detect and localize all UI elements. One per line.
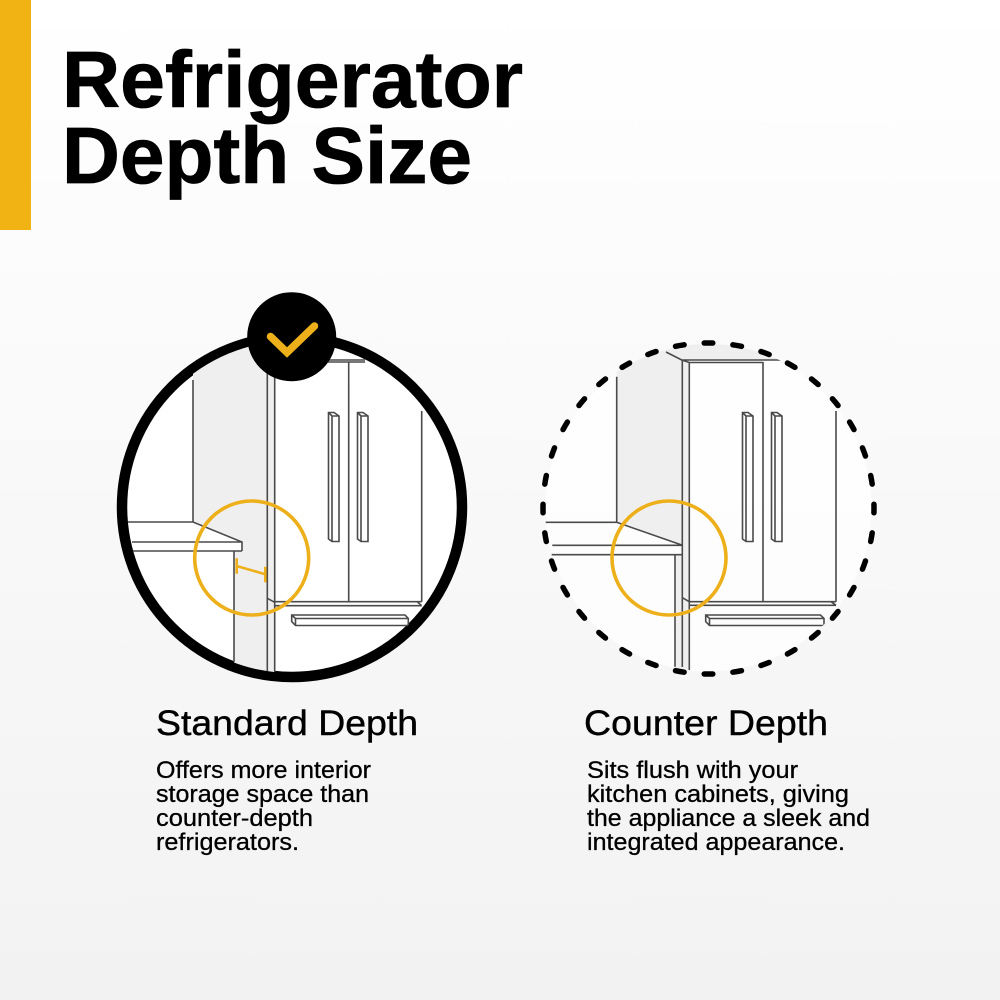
circle frame: standard depth [122,337,462,677]
text block: standard depth: storage space than [156,781,369,808]
title: Depth Size [62,111,472,200]
fridge scene: standard depth [128,340,422,675]
text block: standard depth: refrigerators. [156,829,299,856]
text block: standard depth [156,757,371,856]
badge: check mark [247,292,336,381]
circle frame: counter depth [546,346,872,672]
text block: standard depth: counter-depth [156,805,313,832]
flush marker circle [612,501,726,615]
dashed circle frame [543,343,874,674]
text block: counter depth [587,757,870,856]
panel: counter depth illustration [543,340,874,674]
door handles [328,412,368,542]
freezer handle [292,615,408,626]
heading: counter depth: Counter Depth [584,704,828,743]
title [62,35,523,200]
text block: standard depth: Offers more interior [156,757,371,784]
door handles [742,412,782,542]
freezer handle [706,615,824,626]
title: Refrigerator [62,35,523,124]
heading: standard depth: Standard Depth [156,704,418,743]
text block: counter depth: Sits flush with your [587,757,798,784]
accent bar [0,0,31,230]
text block: counter depth: integrated appearance. [587,829,845,856]
text block: counter depth: kitchen cabinets, giving [587,781,849,808]
text block: counter depth: the appliance a sleek and [587,805,870,832]
panel: standard depth illustration [122,292,462,677]
depth gap marker [195,501,309,615]
fridge scene: counter depth [546,340,836,672]
